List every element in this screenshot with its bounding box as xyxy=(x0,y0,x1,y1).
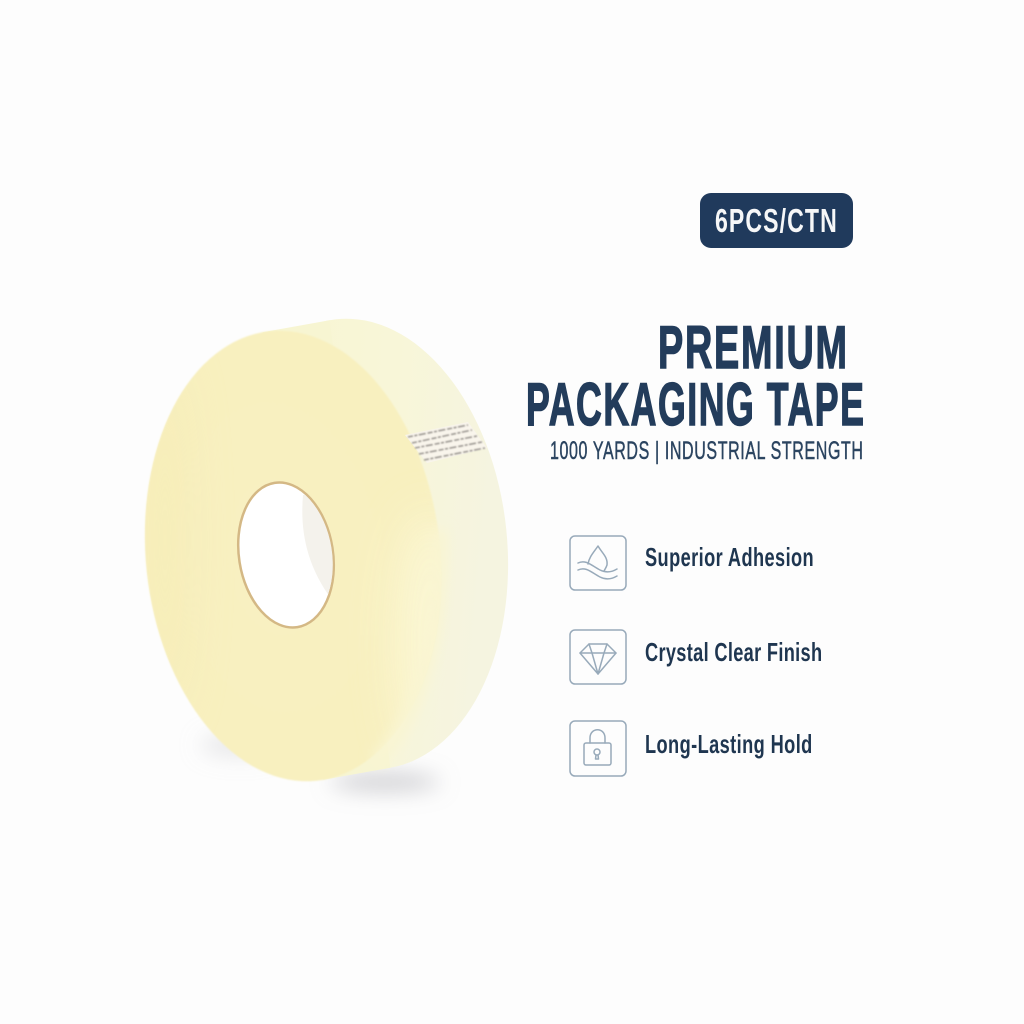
title xyxy=(526,314,864,438)
icon: water drop and waves xyxy=(570,536,626,590)
label: Superior Adhesion xyxy=(645,543,814,572)
icon: diamond xyxy=(570,630,626,684)
badge: 6PCS/CTN xyxy=(700,193,853,248)
roll shadow xyxy=(200,733,440,791)
feature: crystal clear finish xyxy=(570,630,822,684)
title: PREMIUM xyxy=(658,314,847,381)
icon: padlock xyxy=(570,721,626,776)
feature: superior adhesion xyxy=(570,536,814,590)
core hole xyxy=(237,481,335,629)
printed label on tape edge xyxy=(405,422,487,463)
subtitle: 1000 YARDS | INDUSTRIAL STRENGTH xyxy=(550,438,863,465)
feature: long-lasting hold xyxy=(570,721,812,776)
label: Long-Lasting Hold xyxy=(645,730,812,759)
roll front face xyxy=(144,330,442,782)
label: Crystal Clear Finish xyxy=(645,638,822,667)
roll side xyxy=(190,304,530,784)
infographic: premium packaging tape xyxy=(144,193,863,800)
badge: 6PCS/CTN: 6PCS/CTN xyxy=(715,203,837,240)
product: tape roll xyxy=(144,318,508,800)
title: PACKAGING TAPE xyxy=(526,372,864,438)
